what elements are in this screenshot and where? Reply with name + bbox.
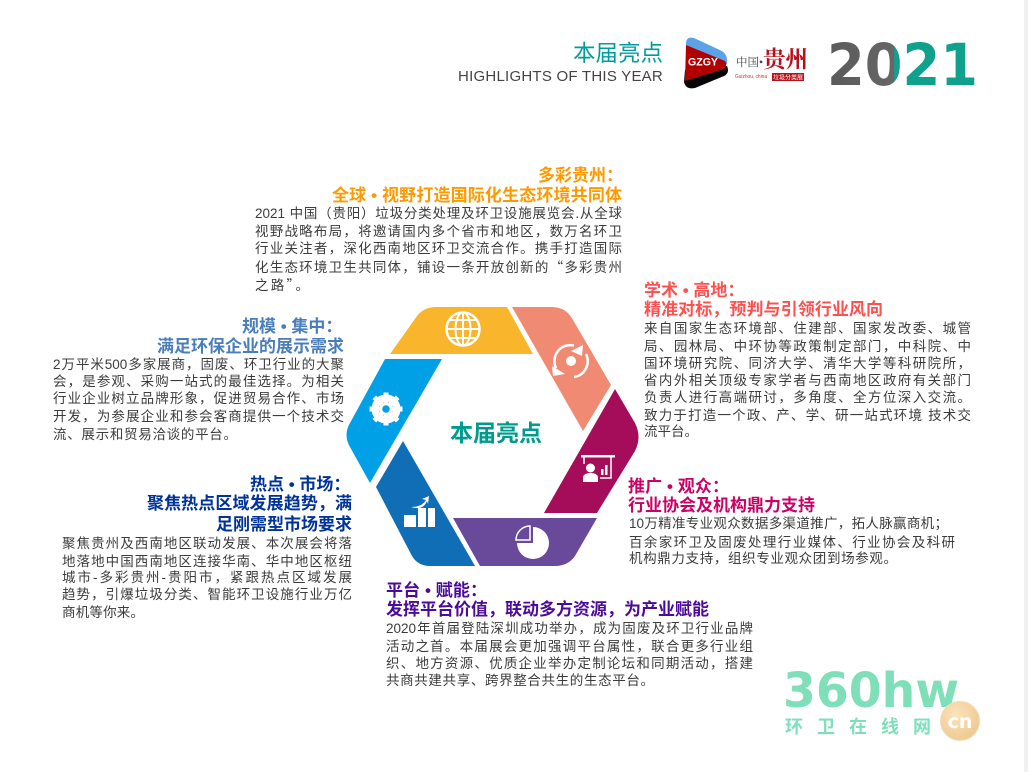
- subheading: 发挥平台价值，联动多方资源，为产业赋能: [386, 600, 709, 619]
- panel: academic highland: [644, 276, 971, 439]
- body text: 致力于打造一个政、产、学、研一站式环境 技术交: [644, 408, 971, 423]
- body text: 趋势，引爆垃圾分类、智能环卫设施行业万亿: [62, 587, 352, 602]
- body text: [255, 206, 622, 294]
- panel: hotspot and market: [62, 470, 352, 620]
- logo: China Guizhou: 垃圾分类展: [773, 74, 803, 82]
- body text: 视野战略布局，将邀请国内多个省市和地区，数万名环卫: [255, 224, 622, 239]
- watermark logo: 环卫在线网: [785, 717, 931, 737]
- body text: 会，是参观、采购一站式的最佳选择。为相关: [53, 374, 344, 389]
- icon: globe: [446, 312, 480, 346]
- body text: [53, 357, 344, 442]
- body text: [644, 321, 971, 439]
- body text: 流平台。: [644, 424, 698, 439]
- body text: [386, 621, 753, 688]
- panel: promotion and audience: [628, 472, 955, 566]
- icon: refresh cycle: [552, 345, 588, 377]
- body text: 2020年首届登陆深圳成功举办，成为固废及环卫行业品牌: [386, 621, 753, 636]
- body text: 机构鼎力支持，组织专业观众团到场参观。: [629, 551, 897, 566]
- center label: 本届亮点: [450, 420, 542, 446]
- icon: bars and arrow: [404, 496, 435, 527]
- segment: refresh: [512, 307, 611, 431]
- logo: China Guizhou: Guizhou, china: [735, 74, 768, 80]
- icon: gear: [370, 392, 402, 426]
- body text: 2万平米500多家展商，固废、环卫行业的大聚: [53, 357, 344, 372]
- body text: 来自国家生态环境部、住建部、国家发改委、城管: [644, 321, 971, 336]
- logo: GZGY: GZGY: [688, 56, 719, 68]
- title: Chinese: 本届亮点: [573, 41, 663, 66]
- heading: 多彩贵州：: [538, 161, 623, 186]
- panel: colourful Guizhou: [255, 161, 623, 294]
- body text: 化生态环境卫生共同体，铺设一条开放创新的“多彩贵州: [255, 256, 622, 276]
- body text: 省内外相关顶级专家学者与西南地区政府有关部门: [644, 373, 971, 388]
- watermark logo: [783, 663, 980, 741]
- body text: 共商共建共享、跨界整合共生的生态平台。: [386, 673, 654, 688]
- body text: 织、地方资源、优质企业举办定制论坛和同期活动，搭建: [386, 656, 753, 671]
- segment: gear: [346, 359, 442, 483]
- body text: 城市-多彩贵州-贵阳市，紧跟热点区域发展: [62, 570, 352, 585]
- watermark logo: cn: [948, 711, 972, 733]
- heading: 学术 • 高地：: [644, 276, 744, 301]
- body text: 地落地中国西南地区连接华南、华中地区枢纽: [62, 554, 352, 569]
- body text: 百余家环卫及固废处理行业媒体、行业协会及科研: [629, 535, 955, 550]
- subheading: 全球 • 视野打造国际化生态环境共同体: [332, 186, 622, 205]
- segment: growth bars: [376, 441, 475, 566]
- body text: 开发，为参展企业和参会客商提供一个技术交: [53, 409, 344, 424]
- body text: 活动之首。本届展会更加强调平台属性，联合更多行业组: [386, 639, 753, 654]
- segment: pie chart: [453, 518, 597, 566]
- body text: 2021 中国（贵阳）垃圾分类处理及环卫设施展览会.从全球: [255, 206, 622, 221]
- body text: [62, 536, 352, 620]
- header title: [458, 41, 663, 85]
- logo: China Guizhou: 贵州: [763, 47, 808, 72]
- subheading: 满足环保企业的展示需求: [157, 337, 344, 356]
- body text: 行业企业树立品牌形象，促进贸易合作、市场: [53, 391, 344, 406]
- icon: pie: [516, 526, 549, 559]
- body text: 商机等你来。: [62, 605, 144, 620]
- body text: 负责人进行高端研讨，多角度、全方位深入交流。: [644, 390, 971, 405]
- segment: globe: [390, 307, 533, 354]
- heading: 规模 • 集中：: [242, 312, 342, 337]
- heading: 平台 • 赋能：: [386, 576, 487, 601]
- panel: scale and concentration: [53, 312, 344, 442]
- subheading: 聚焦热点区域发展趋势，满: [147, 494, 352, 513]
- body text: 局、园林局、中环协等政策制定部门，中科院、中: [644, 339, 971, 354]
- watermark logo: 360hw: [783, 663, 959, 719]
- logo: China Guizhou: 中国•: [736, 55, 763, 69]
- subheading: 行业协会及机构鼎力支持: [628, 496, 815, 515]
- logo: GZGY: [684, 38, 728, 88]
- body text: 之路”。: [255, 274, 309, 294]
- segment: presentation: [544, 389, 638, 513]
- hexagon diagram: [346, 307, 638, 566]
- body text: 国环境研究院、同济大学、清华大学等科研院所，: [644, 356, 971, 371]
- panel: platform and empowerment: [386, 576, 753, 688]
- logo: China Guizhou: [735, 47, 808, 82]
- subheading: [147, 494, 352, 534]
- body text: 行业关注者，深化西南地区环卫交流合作。携手打造国际: [255, 241, 622, 256]
- body text: 流、展示和贸易洽谈的平台。: [53, 427, 237, 442]
- heading: 推广 • 观众：: [628, 472, 729, 497]
- body text: 聚焦贵州及西南地区联动发展、本次展会将落: [62, 536, 352, 551]
- body text: [629, 516, 955, 566]
- title: English: HIGHLIGHTS OF THIS YEAR: [458, 68, 663, 85]
- icon: presentation board: [581, 455, 615, 482]
- heading: 热点 • 市场：: [250, 470, 350, 495]
- subheading: 精准对标，预判与引领行业风向: [644, 300, 883, 319]
- body text: 10万精准专业观众数据多渠道推广，拓人脉赢商机；: [629, 516, 948, 531]
- subheading: 足刚需型市场要求: [216, 515, 352, 534]
